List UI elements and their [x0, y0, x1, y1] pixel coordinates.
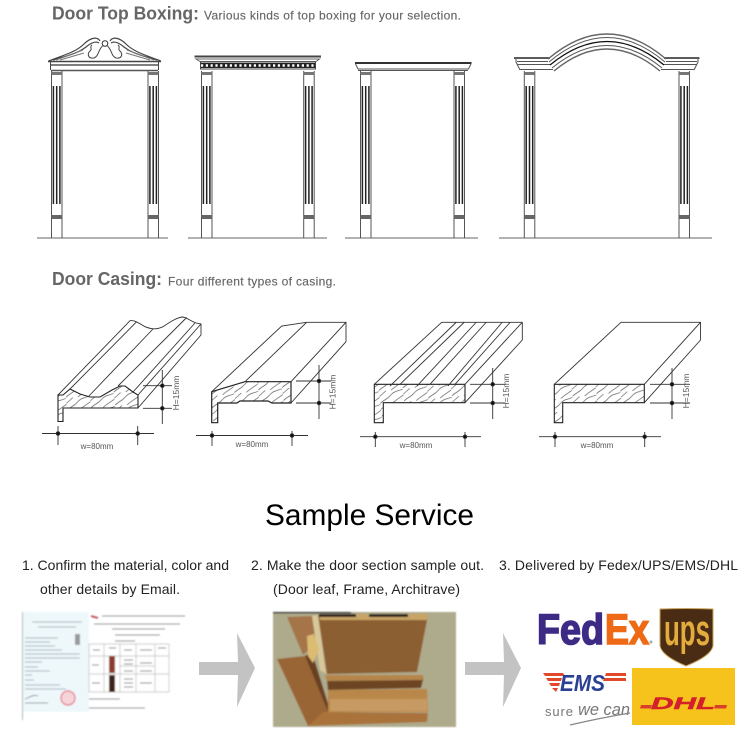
casing 2: chamfered profile: w=80mm [235, 440, 269, 449]
logo: FedEx: Fed [537, 606, 604, 654]
heading: sample service: Sample Service [265, 499, 474, 532]
image: certificate and quotation documents [22, 612, 186, 720]
step 2 caption: (Door leaf, Frame, Architrave) [273, 581, 460, 597]
step 2 caption [251, 557, 484, 597]
heading: door top boxing: Various kinds of top boxing for your selection. [204, 8, 461, 22]
door top boxing: plain cornice door [345, 63, 478, 238]
step 2 caption: 2. Make the door section sample out. [251, 557, 484, 573]
casing 2: chamfered profile: H=15mm [328, 375, 338, 409]
casing 2: chamfered profile [196, 322, 346, 449]
logo: UPS shield [660, 606, 713, 666]
arrow 1 [199, 633, 255, 707]
door top boxing: arched door [499, 34, 712, 238]
logo: DHL [632, 668, 735, 725]
casing 3: grooved profile: w=80mm [399, 441, 433, 450]
step 1 caption: 1. Confirm the material, color and [22, 557, 229, 573]
logo: FedEx [537, 606, 652, 654]
casing 1: ogee profile: w=80mm [80, 442, 114, 451]
heading: door casing [52, 268, 336, 289]
casing 1: ogee profile: H=15mm [171, 376, 181, 410]
step 1 caption [22, 557, 229, 597]
arrow 2 [465, 633, 521, 707]
heading: door casing: Door Casing: [52, 268, 162, 289]
image: door section sample photo [273, 612, 456, 727]
logo: EMS: EMS [560, 670, 606, 696]
logo: sure we can slogan: we can [578, 700, 630, 719]
casing 3: grooved profile [360, 322, 522, 450]
logo: sure we can slogan [545, 700, 630, 725]
step 1 caption: other details by Email. [40, 581, 180, 597]
logo: FedEx: Ex [605, 606, 649, 654]
logo: UPS shield: ups [664, 606, 710, 655]
logo: EMS [543, 670, 626, 696]
heading: door top boxing [52, 2, 461, 24]
logo: sure we can slogan: sure [545, 704, 573, 719]
casing 4: flat profile: H=15mm [681, 374, 691, 408]
door top boxing: dentil door [188, 56, 327, 238]
step 3 caption: 3. Delivered by Fedex/UPS/EMS/DHL [499, 557, 738, 573]
casing 4: flat profile [539, 322, 700, 450]
casing 1: ogee profile [42, 317, 201, 451]
logo: DHL: DHL [651, 694, 715, 713]
casing 3: grooved profile: H=15mm [501, 374, 511, 408]
door top boxing: pediment door [37, 38, 168, 238]
casing 4: flat profile: w=80mm [580, 441, 614, 450]
heading: door casing: Four different types of casing. [168, 274, 336, 288]
heading: door top boxing: Door Top Boxing: [52, 2, 199, 24]
